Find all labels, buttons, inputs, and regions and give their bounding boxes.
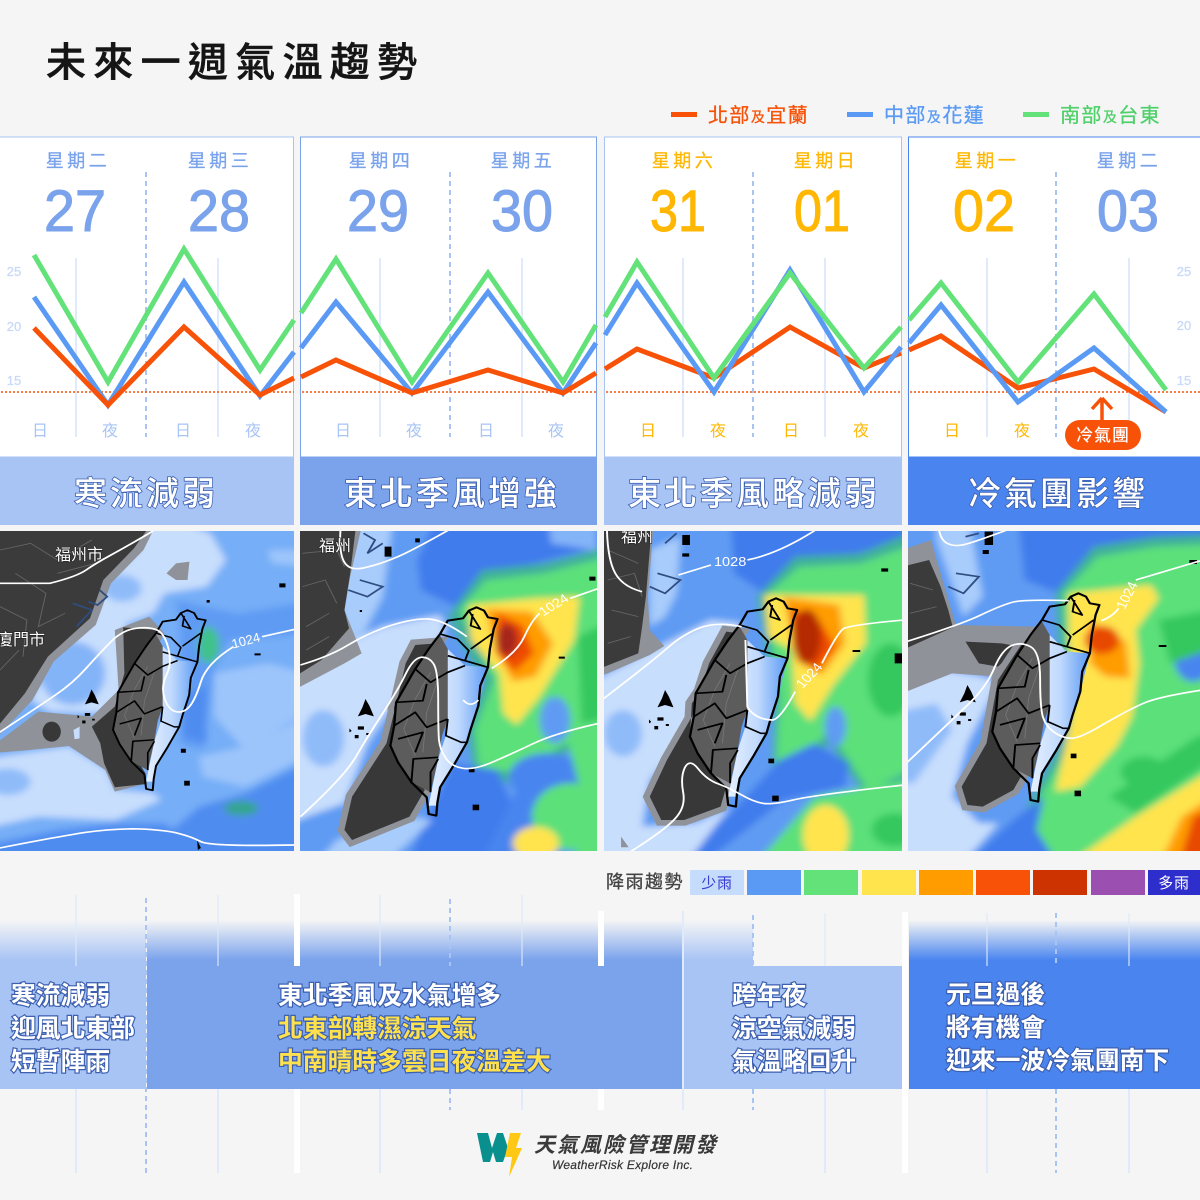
map: rainfall forecast panel 3 bbox=[604, 531, 902, 851]
arrow: cold air mass bbox=[1092, 398, 1112, 421]
heading band: cold current weakening: 寒流減弱 bbox=[74, 475, 218, 512]
map: rainfall forecast panel 4 bbox=[908, 531, 1200, 851]
pressure label: 1024 bbox=[230, 630, 262, 652]
heading band: northeast monsoon strengthening: 東北季風增強 bbox=[344, 475, 560, 512]
day night labels bbox=[944, 422, 1030, 440]
logo: WeatherRisk bbox=[477, 1133, 719, 1177]
colour scale: 少雨 bbox=[701, 875, 733, 892]
panel: 02-03 temperature chart bbox=[908, 137, 1200, 457]
legend item: central and Hualien: 中部及花蓮 bbox=[884, 104, 985, 127]
day night labels bbox=[335, 422, 564, 440]
dates bbox=[650, 179, 850, 244]
map: rainfall forecast panel 1 bbox=[0, 531, 294, 851]
day headers bbox=[652, 151, 858, 171]
text block: after new year cold air: 將有機會 bbox=[946, 1014, 1045, 1042]
text block: cold current weakening: 短暫陣雨 bbox=[11, 1048, 110, 1076]
dates: 29 bbox=[347, 179, 409, 244]
logo name: 天氣風險管理開發 bbox=[534, 1133, 719, 1157]
day headers: 星期二 bbox=[1097, 151, 1161, 171]
title: 未來一週氣溫趨勢 bbox=[46, 41, 424, 85]
axis labels: 15 bbox=[1177, 373, 1191, 388]
text block: after new year cold air: 元旦過後 bbox=[946, 981, 1045, 1009]
day headers bbox=[955, 151, 1161, 171]
text block: new year eve: 跨年夜 bbox=[732, 982, 807, 1010]
axis labels: 15 bbox=[7, 373, 21, 388]
legend item: south and Taitung: 南部及台東 bbox=[1060, 104, 1161, 127]
dates: 01 bbox=[794, 179, 850, 244]
dates: 31 bbox=[650, 179, 706, 244]
map: rainfall forecast panel 2 bbox=[300, 531, 597, 851]
colour scale bbox=[690, 870, 1200, 895]
day headers: 星期五 bbox=[491, 151, 555, 171]
day night labels: 夜 bbox=[710, 422, 726, 440]
day night labels: 日 bbox=[478, 423, 494, 440]
panel: 27-28 temperature chart bbox=[0, 137, 294, 457]
day night labels bbox=[32, 422, 261, 440]
axis labels bbox=[7, 264, 21, 388]
text block: new year eve: 氣溫略回升 bbox=[732, 1048, 856, 1076]
callout: cold air mass bbox=[1065, 420, 1141, 450]
logo mark bbox=[477, 1133, 522, 1177]
map label: Fuzhou: 福州 bbox=[319, 537, 351, 555]
panel: 31-01 temperature chart bbox=[604, 137, 902, 457]
text block: monsoon and moisture increasing: 東北季風及水氣增多 bbox=[278, 982, 501, 1010]
day night labels: 夜 bbox=[548, 422, 564, 440]
heading band: northeast monsoon slightly weakening: 東北季風略減弱 bbox=[628, 475, 880, 512]
day night labels: 日 bbox=[783, 423, 799, 440]
legend heading: 降雨趨勢 bbox=[606, 872, 684, 892]
legend item: north and Yilan: 北部及宜蘭 bbox=[708, 104, 809, 127]
day night labels: 日 bbox=[32, 423, 48, 440]
text block: new year eve: 涼空氣減弱 bbox=[732, 1015, 856, 1043]
day headers: 星期三 bbox=[188, 151, 252, 171]
summary timeline bands bbox=[0, 894, 1200, 1173]
map label: Fuzhou: 福州市 bbox=[55, 546, 103, 564]
text block: monsoon and moisture increasing: 北東部轉濕涼天氣 bbox=[278, 1015, 477, 1043]
map: rainfall forecast panel 3: 1028 bbox=[714, 555, 746, 569]
dates: 03 bbox=[1097, 179, 1159, 244]
heading band: northeast monsoon strengthening bbox=[300, 457, 597, 525]
map label: Fuzhou: 福州 bbox=[621, 528, 653, 546]
day headers: 星期二 bbox=[46, 151, 110, 171]
text block: after new year cold air: 迎來一波冷氣團南下 bbox=[946, 1047, 1169, 1075]
map: rainfall forecast panel 2: 1024 bbox=[536, 591, 572, 619]
day night labels: 夜 bbox=[1014, 422, 1030, 440]
dates bbox=[953, 179, 1159, 244]
heading band: cold current weakening bbox=[0, 457, 294, 525]
dates: 30 bbox=[491, 179, 553, 244]
axis labels: 25 bbox=[7, 264, 21, 279]
logo english name: WeatherRisk Explore Inc. bbox=[552, 1158, 693, 1172]
day night labels: 日 bbox=[175, 423, 191, 440]
day headers: 星期一 bbox=[955, 151, 1019, 171]
heading band: cold air mass influence: 冷氣團影響 bbox=[968, 475, 1148, 512]
axis labels: 25 bbox=[1177, 264, 1191, 279]
heading band: northeast monsoon slightly weakening bbox=[604, 457, 902, 525]
panel: 29-30 temperature chart bbox=[300, 137, 596, 457]
legend: temperature regions bbox=[671, 104, 1161, 127]
map: rainfall forecast panel 4: 1024 bbox=[1113, 579, 1141, 611]
day night labels: 夜 bbox=[406, 422, 422, 440]
axis labels: 20 bbox=[1177, 318, 1191, 333]
dates: 28 bbox=[188, 179, 250, 244]
day night labels: 日 bbox=[335, 423, 351, 440]
day night labels: 日 bbox=[640, 423, 656, 440]
day headers bbox=[349, 151, 555, 171]
dates: 27 bbox=[44, 179, 106, 244]
text block: monsoon and moisture increasing: 中南晴時多雲日夜溫差大 bbox=[278, 1048, 551, 1076]
temperature lines bbox=[605, 262, 901, 392]
heading band: cold air mass influence bbox=[908, 457, 1200, 525]
axis labels bbox=[1177, 264, 1191, 388]
temperature lines bbox=[909, 283, 1166, 412]
day night labels: 日 bbox=[944, 423, 960, 440]
day night labels: 夜 bbox=[102, 422, 118, 440]
day headers bbox=[46, 151, 252, 171]
text block: cold current weakening: 迎風北東部 bbox=[11, 1015, 135, 1043]
day headers: 星期四 bbox=[349, 151, 413, 171]
map: rainfall forecast panel 3: 1024 bbox=[793, 660, 826, 691]
day night labels: 夜 bbox=[853, 422, 869, 440]
day headers: 星期六 bbox=[652, 151, 716, 171]
temperature lines bbox=[34, 249, 294, 405]
dates bbox=[44, 179, 250, 244]
axis labels: 20 bbox=[7, 319, 21, 334]
rainfall trend legend bbox=[606, 870, 1200, 895]
dates: 02 bbox=[953, 179, 1015, 244]
callout: cold air mass: 冷氣團 bbox=[1076, 426, 1130, 445]
colour scale: 多雨 bbox=[1158, 874, 1190, 892]
day headers: 星期日 bbox=[794, 151, 858, 171]
temperature lines bbox=[301, 259, 596, 393]
day night labels bbox=[640, 422, 869, 440]
dates bbox=[347, 179, 553, 244]
day night labels: 夜 bbox=[245, 422, 261, 440]
text block: cold current weakening: 寒流減弱 bbox=[11, 981, 110, 1010]
